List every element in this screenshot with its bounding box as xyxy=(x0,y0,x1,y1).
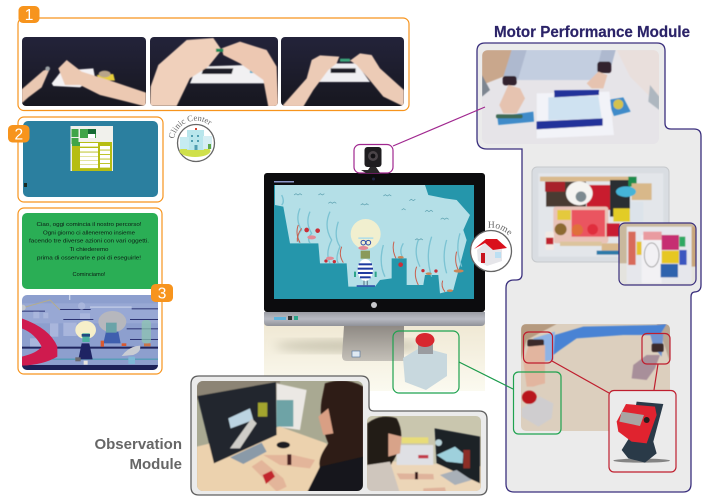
photo: reaching for object xyxy=(22,37,146,107)
connector: button to table view xyxy=(459,362,513,389)
photo: child watching screen, side view xyxy=(197,380,363,493)
photo: hands with watches and button xyxy=(521,324,670,431)
icon: home xyxy=(470,222,512,272)
title: motor performance module: Motor Performance Module xyxy=(494,24,690,41)
icon: clinic center xyxy=(169,116,216,162)
connector: camera to table view xyxy=(393,107,485,146)
monitor bezel xyxy=(264,173,485,312)
photo: packed object box inset xyxy=(619,223,697,287)
text block: instructions: Ti chiederemo xyxy=(70,247,108,253)
monitor stand xyxy=(342,326,404,361)
text block: instructions: facendo tre diverse azioni con vari oggetti. xyxy=(29,239,149,245)
text block: instructions: Cominciamo! xyxy=(72,272,106,278)
callout lines: sensor links xyxy=(524,332,670,393)
game screen xyxy=(274,185,474,299)
photo: grasping object xyxy=(150,37,278,107)
callout: left wrist sensor xyxy=(524,332,552,363)
badge: number 3 xyxy=(151,284,173,302)
panel: observation module xyxy=(191,376,487,495)
photo: placing object xyxy=(281,37,404,107)
monitor xyxy=(264,173,485,391)
table: score form xyxy=(70,126,113,171)
panel: step 3 instructions and scene xyxy=(18,208,173,374)
monitor chin xyxy=(264,312,485,326)
photo: object box xyxy=(532,167,669,262)
heading: observation module: Module xyxy=(130,456,182,473)
push button in green callout xyxy=(393,331,459,393)
callout: wrist sensor close-up xyxy=(609,390,676,472)
text block: instructions: Ciao, oggi comincia il nostro percorso! xyxy=(36,222,142,228)
badge: number 2: 2 xyxy=(14,126,23,144)
heading: observation module xyxy=(94,436,182,473)
callout: right wrist sensor xyxy=(642,334,670,364)
panel: motor performance module background xyxy=(477,43,701,492)
badge: number 2 xyxy=(8,125,30,144)
badge: number 1 xyxy=(18,6,40,24)
panel: step 1 photos xyxy=(18,6,409,110)
label: home: Home xyxy=(488,222,512,236)
label: clinic center: Clinic Center xyxy=(169,116,212,138)
badge: number 1: 1 xyxy=(25,7,33,24)
text block: instructions: Ogni giorno ci alleneremo insieme xyxy=(43,230,135,236)
callout: button on table xyxy=(514,372,561,434)
icon: webcam xyxy=(354,144,393,173)
photo: table top task xyxy=(482,50,660,144)
heading: observation module: Observation xyxy=(94,436,182,453)
photo: child watching screen, rear view xyxy=(367,416,481,493)
badge: number 3: 3 xyxy=(158,286,166,302)
text block: instructions: prima di osservarle e poi di eseguirle! xyxy=(37,255,142,261)
desk background xyxy=(264,320,485,391)
text block: instructions xyxy=(22,213,158,289)
illustration: laboratory scene xyxy=(20,293,160,372)
panel: step 2 clinician interface xyxy=(8,117,163,202)
